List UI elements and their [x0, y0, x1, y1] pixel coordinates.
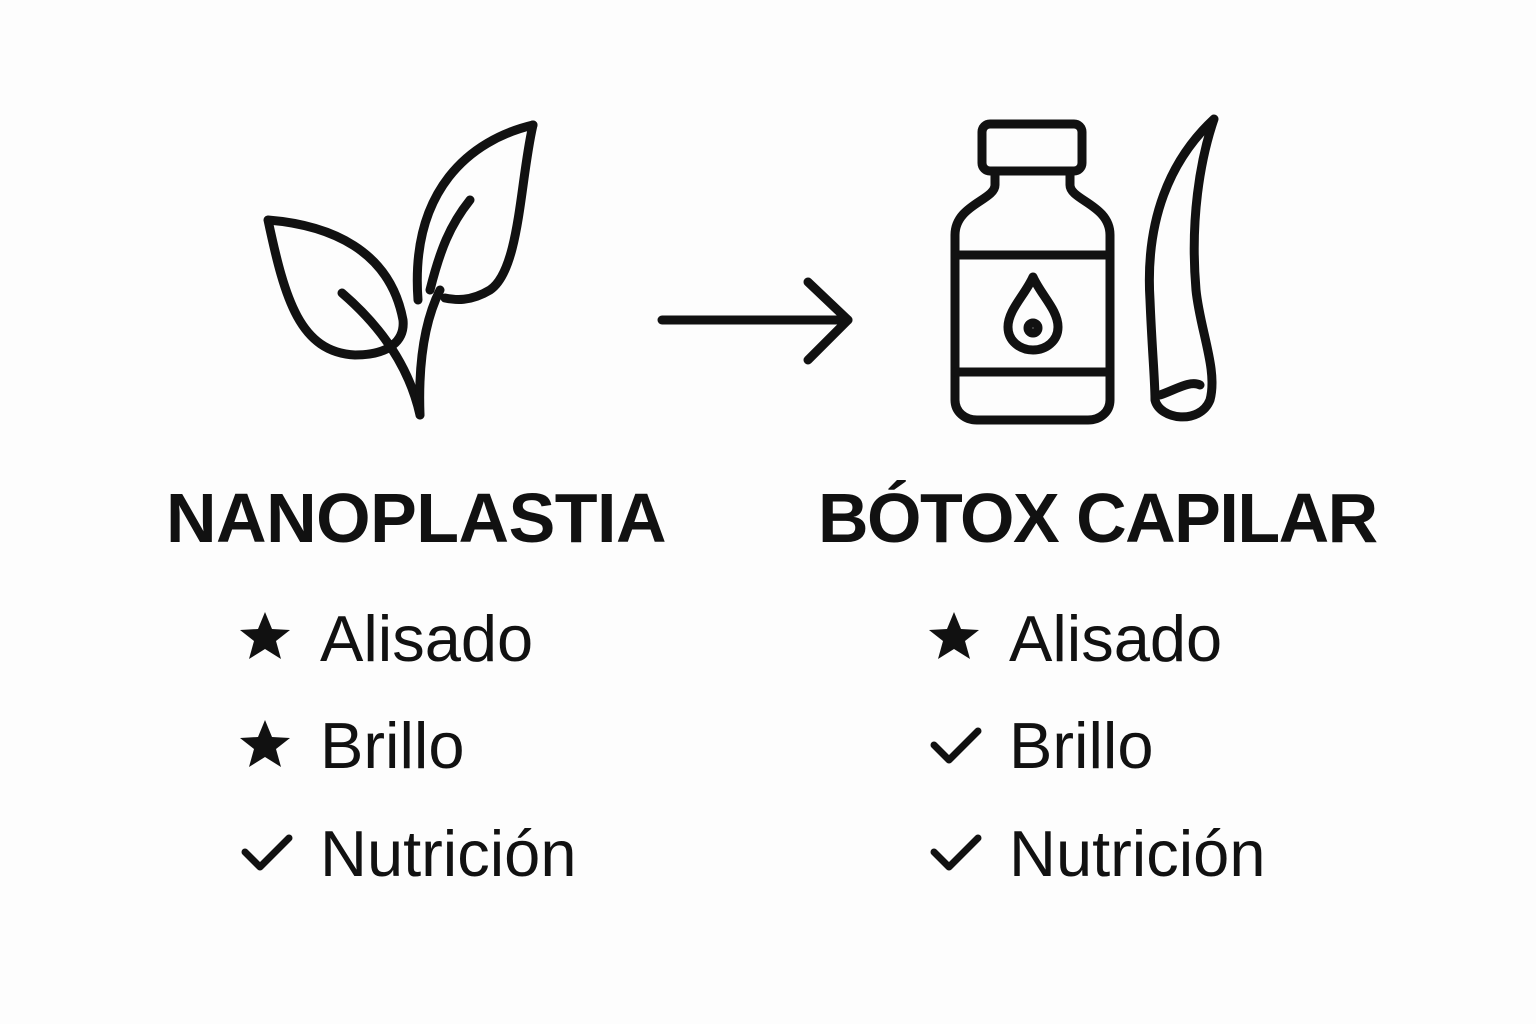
- icon: aloe leaf: [1149, 119, 1214, 417]
- item: brillo: Brillo: [320, 709, 464, 782]
- icon: check 1: [245, 838, 289, 867]
- icon: check 2: [934, 731, 978, 760]
- icon: bottle: [955, 124, 1110, 420]
- item: nutricion: Nutrición: [320, 817, 576, 890]
- title: botox capilar: BÓTOX CAPILAR: [818, 479, 1377, 557]
- list: nanoplastia: [320, 602, 576, 890]
- icon: star 1: [240, 612, 290, 659]
- icon: leaves: [268, 125, 533, 415]
- icon: star 2: [240, 720, 290, 767]
- item: alisado: Alisado: [1009, 602, 1222, 675]
- item: brillo: Brillo: [1009, 709, 1153, 782]
- title: nanoplastia: NANOPLASTIA: [166, 479, 666, 557]
- list: botox: [1009, 602, 1265, 890]
- item: nutricion: Nutrición: [1009, 817, 1265, 890]
- icon: star 3: [929, 612, 979, 659]
- item: alisado: Alisado: [320, 602, 533, 675]
- icon: check 3: [934, 838, 978, 867]
- arrow: [662, 282, 848, 360]
